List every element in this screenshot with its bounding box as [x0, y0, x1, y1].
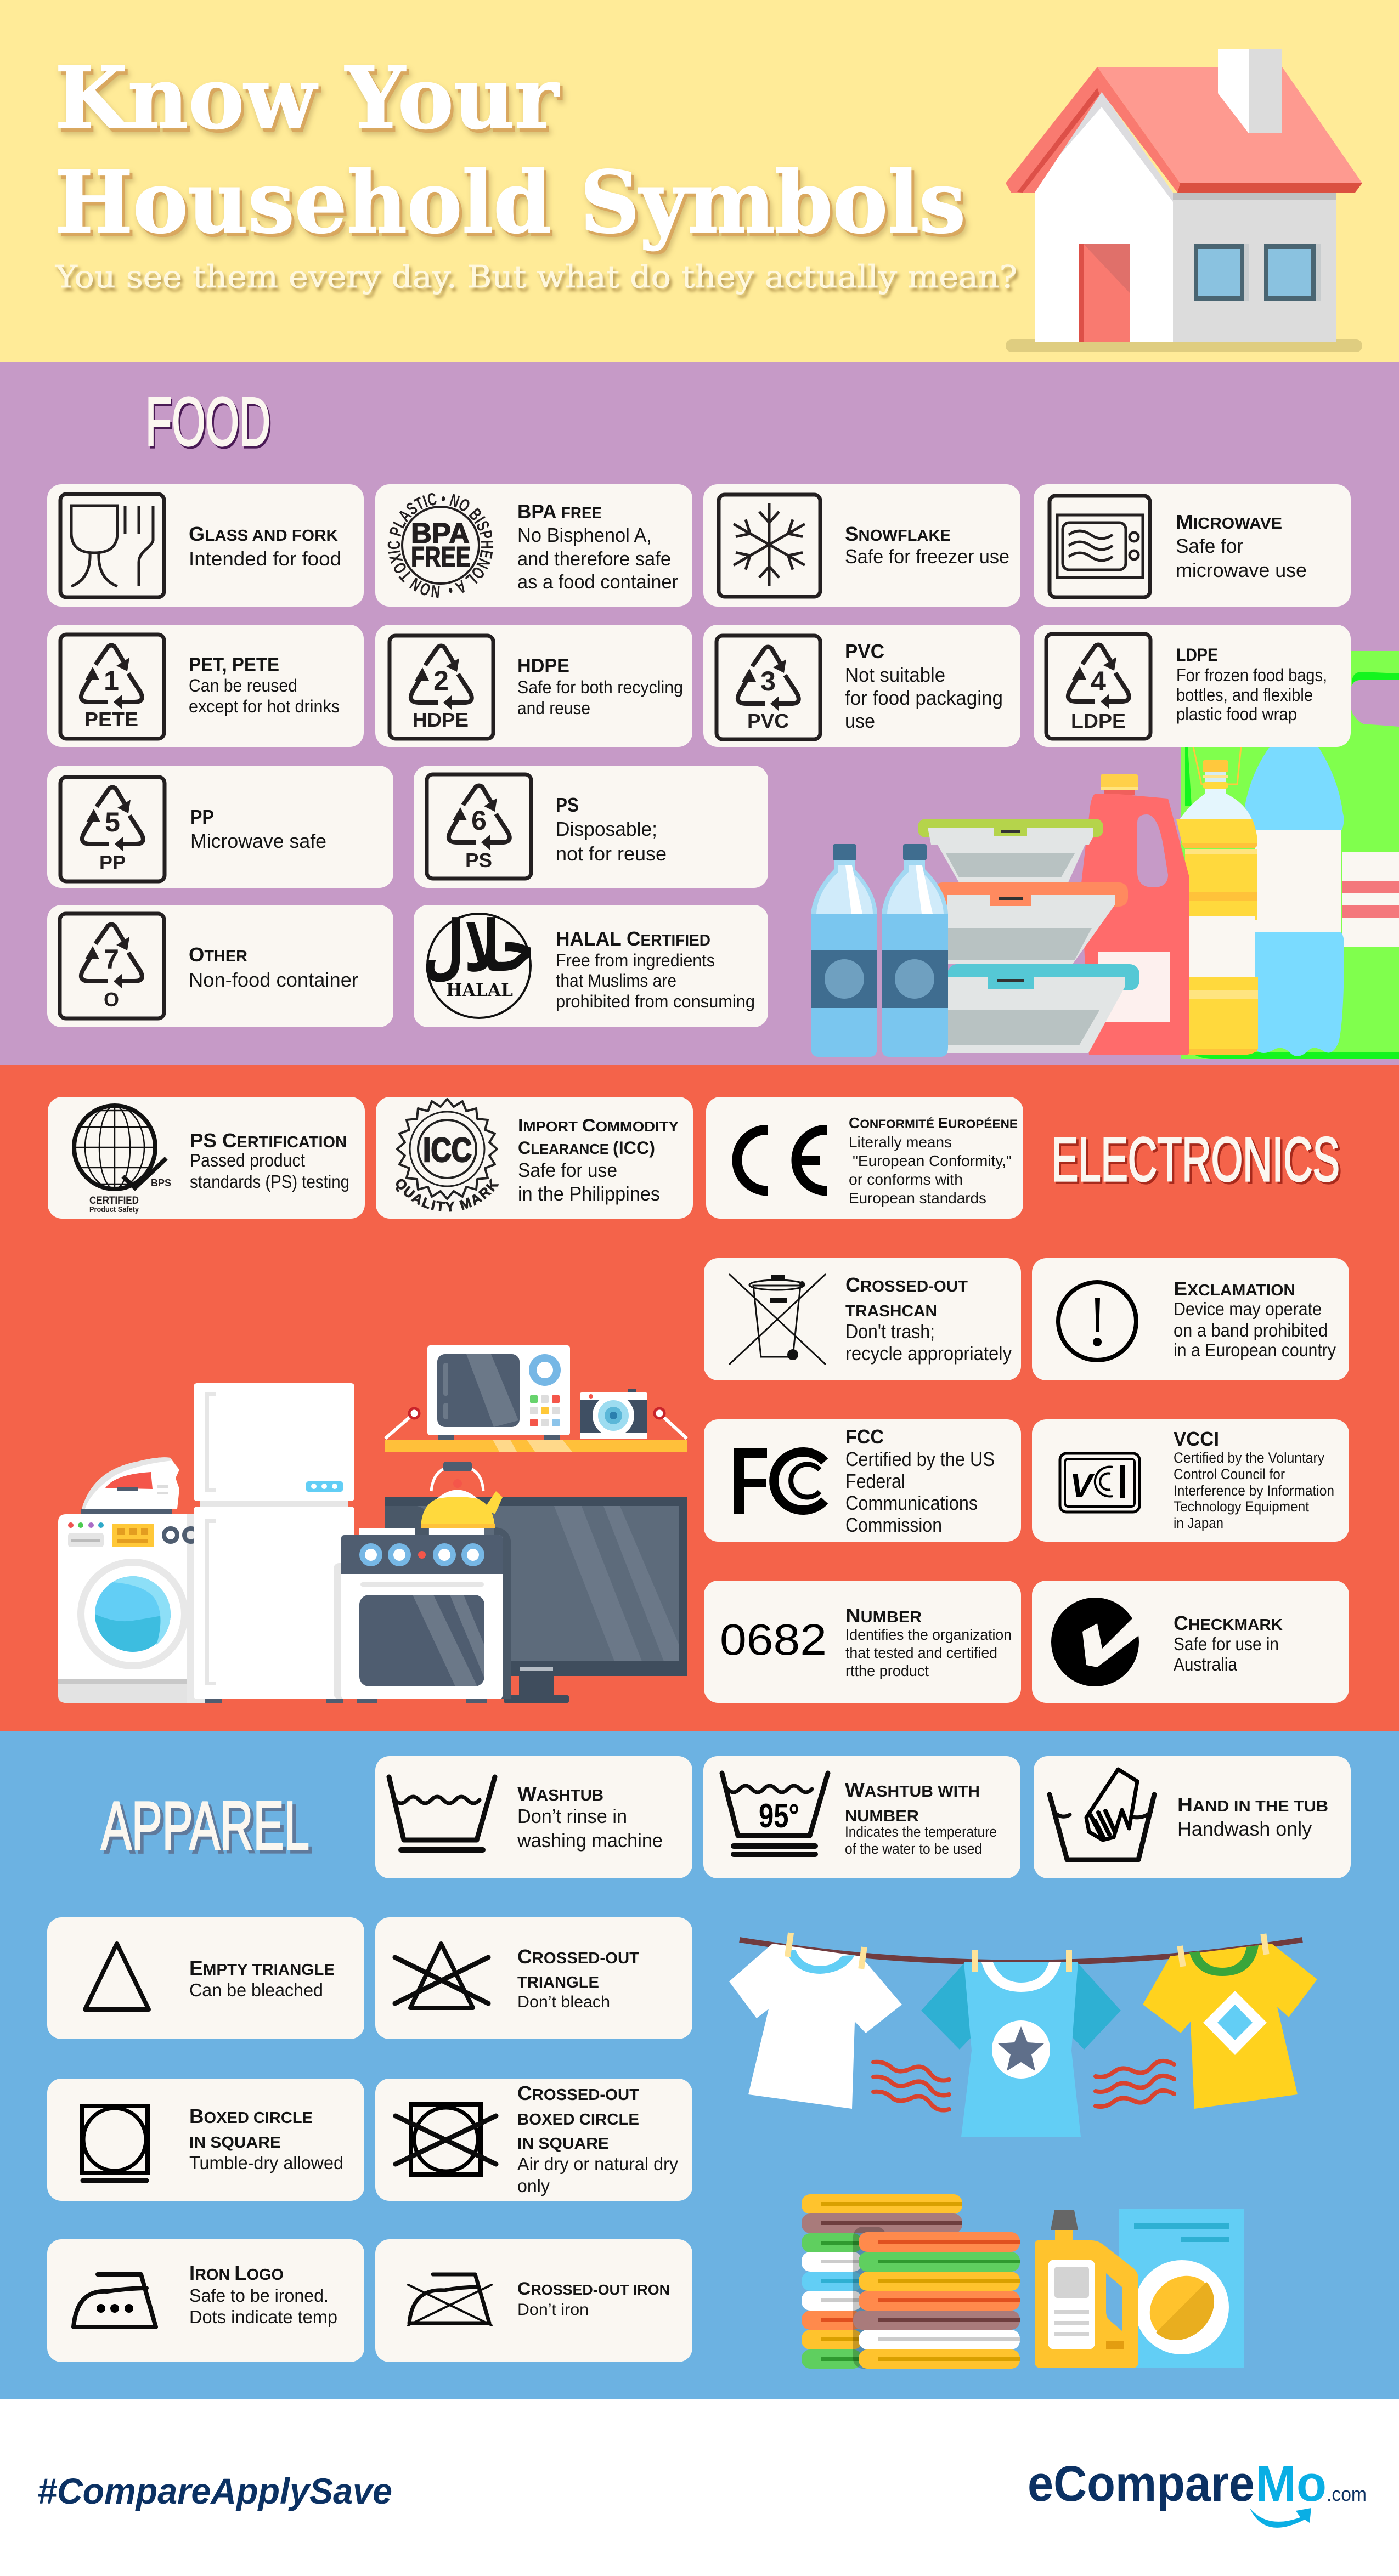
icon: recycle 6 PS — [427, 774, 531, 879]
text: conformité européene — [849, 1114, 1018, 1207]
card: checkmark — [1032, 1581, 1349, 1703]
text: crossed-out iron: Don’t iron — [517, 2301, 589, 2319]
icon: ICC quality mark: ICC — [423, 1131, 472, 1169]
card: VCCI — [1032, 1419, 1349, 1542]
text: import commodity clearance: CLEARANCE (ICC) — [518, 1138, 655, 1158]
icon: PS certification mark: CERTIFIED — [89, 1195, 139, 1207]
text: halal certified — [556, 927, 755, 1011]
text: FCC: Federal — [845, 1470, 905, 1492]
text: number: Identifies the organization — [845, 1626, 1012, 1643]
illustration: laundry stack, detergent and box — [802, 2194, 1244, 2369]
panel: electronics section — [0, 1065, 1399, 1731]
text: crossed-out boxed circle — [517, 2082, 678, 2196]
icon: triangle — [85, 1944, 149, 2009]
text: microwave: microwave use — [1176, 559, 1307, 581]
text: PET, PETE: Can be reused — [189, 676, 297, 695]
text: boxed circle: BOXED CIRCLE — [189, 2105, 313, 2127]
text: exclamation — [1174, 1277, 1336, 1360]
text: hand in the tub: HAND IN THE TUB — [1177, 1793, 1328, 1816]
text: glass and fork: GLASS AND FORK — [189, 523, 338, 545]
icon: iron with dots — [74, 2274, 156, 2327]
text: checkmark: Australia — [1174, 1654, 1238, 1674]
text: halal certified: HALAL CERTIFIED — [556, 927, 710, 950]
text: BPA free: and therefore safe — [517, 547, 671, 570]
text: other: Non-food container — [189, 969, 358, 991]
text: FCC: FCC — [845, 1425, 884, 1448]
icon: recycle 7 O — [60, 914, 164, 1018]
card: halal certified — [414, 905, 768, 1027]
text: conformité européene: "European Conformity," — [853, 1152, 1012, 1169]
icon: recycle 1 PETE: PETE — [84, 708, 138, 731]
text: VCCI: Control Council for — [1174, 1466, 1285, 1482]
text: crossed-out boxed circle: Air dry or natural dry — [517, 2154, 678, 2174]
text: crossed-out trashcan: CROSSED-OUT — [845, 1273, 968, 1296]
text: import commodity clearance — [518, 1116, 679, 1205]
card: washtub — [375, 1756, 692, 1878]
text: BPA free: No Bisphenol A, — [517, 524, 652, 546]
text: PS: not for reuse — [556, 842, 667, 865]
icon: BPA free seal: BPA — [411, 518, 470, 550]
illustration: food containers and bottles — [811, 651, 1399, 1059]
text: crossed-out trashcan: TRASHCAN — [845, 1303, 937, 1320]
text: PS certification: standards (PS) testing — [190, 1171, 349, 1192]
icon: checkmark — [1051, 1598, 1144, 1686]
text: HDPE: Safe for both recycling — [517, 677, 683, 697]
text: FCC — [845, 1425, 995, 1536]
text: crossed-out boxed circle: BOXED CIRCLE — [517, 2111, 639, 2128]
text: HDPE — [517, 654, 683, 718]
text: BPA free — [517, 500, 678, 593]
icon: PS certification mark: BPS — [151, 1177, 171, 1188]
illustration: clothesline — [729, 1933, 1317, 2137]
card: LDPE — [1034, 625, 1351, 747]
card: PS — [414, 766, 768, 888]
icon: recycle 4 LDPE: LDPE — [1071, 710, 1126, 732]
text: exclamation: on a band prohibited — [1174, 1320, 1328, 1340]
icon: washtub — [389, 1777, 495, 1850]
text: PS certification — [190, 1129, 349, 1192]
card: PS certification — [48, 1097, 365, 1219]
text: import commodity clearance: in the Philippines — [518, 1182, 660, 1205]
icon: hand in the tub — [1050, 1769, 1154, 1860]
text: washtub — [517, 1782, 663, 1852]
text: washtub: washing machine — [517, 1829, 663, 1852]
icon: recycle 2 HDPE — [390, 636, 493, 739]
icon: washtub 95: 95° — [759, 1797, 799, 1835]
text: exclamation: EXCLAMATION — [1174, 1277, 1295, 1300]
text: number — [845, 1604, 1012, 1679]
text: VCCI — [1174, 1428, 1334, 1531]
icon: recycle 3 PVC: PVC — [747, 710, 789, 732]
text: VCCI: Interference by Information — [1174, 1482, 1334, 1499]
text: washtub: WASHTUB — [517, 1782, 603, 1805]
text: FCC: Commission — [845, 1514, 942, 1536]
text: FCC: Certified by the US — [845, 1448, 995, 1470]
card: number — [704, 1581, 1021, 1703]
card: hand in the tub — [1034, 1756, 1351, 1878]
text: FCC: Communications — [845, 1492, 978, 1514]
text: microwave: MICROWAVE — [1176, 511, 1282, 533]
card: crossed-out boxed circle — [375, 2079, 692, 2201]
heading: apparel: APPAREL — [101, 1788, 309, 1864]
text: crossed-out triangle — [517, 1945, 640, 2011]
icon: microwave — [1050, 496, 1150, 597]
card: glass and fork — [47, 484, 364, 607]
text: conformité européene: European standards — [849, 1190, 986, 1207]
text: iron logo: IRON LOGO — [189, 2262, 284, 2284]
icon: halal seal: HALAL — [446, 980, 513, 1000]
text: conformité européene: Literally means — [849, 1134, 952, 1151]
icon: recycle 6 PS: PS — [465, 849, 492, 871]
text: iron logo: Dots indicate temp — [189, 2307, 337, 2327]
icon: ICC quality mark: QUALITY MARK — [396, 1178, 499, 1212]
card: import commodity clearance — [376, 1097, 693, 1219]
icon: recycle 1 PETE: 1 — [104, 665, 119, 696]
text: VCCI: VCCI — [1174, 1428, 1219, 1450]
icon: crossed-out iron — [408, 2274, 492, 2325]
text: PP — [190, 806, 326, 852]
text: washtub: Don’t rinse in — [517, 1805, 627, 1827]
text: VCCI: Technology Equipment — [1174, 1498, 1309, 1515]
text: glass and fork: Intended for food — [189, 547, 341, 570]
icon: PS certification mark: Product Safety — [89, 1205, 139, 1214]
icon: VCCI logo — [1060, 1453, 1139, 1512]
icon: crossed-out boxed circle — [396, 2104, 496, 2175]
text: PVC: for food packaging — [845, 687, 1003, 709]
text: hand in the tub: Handwash only — [1177, 1818, 1312, 1840]
text: LDPE: plastic food wrap — [1176, 704, 1297, 724]
logo: eCompareMo — [1028, 2456, 1367, 2528]
icon: recycle 3 PVC — [717, 636, 820, 739]
text: boxed circle: IN SQUARE — [189, 2134, 281, 2152]
icon: recycle 2 HDPE: HDPE — [413, 709, 469, 731]
text: exclamation: Device may operate — [1174, 1299, 1322, 1319]
text: BPA free: as a food container — [517, 570, 678, 593]
text: PS certification: Passed product — [190, 1150, 305, 1170]
text: glass and fork — [189, 523, 341, 570]
text: halal certified: that Muslims are — [556, 971, 676, 990]
hashtag: #CompareApplySave — [37, 2471, 392, 2511]
text: LDPE: LDPE — [1176, 645, 1218, 665]
card: PP — [47, 766, 393, 888]
icon: recycle 6 PS: 6 — [471, 805, 487, 836]
text: import commodity clearance: IMPORT COMMODITY — [518, 1116, 679, 1135]
text: BPA free: BPA FREE — [517, 500, 602, 523]
card: other — [47, 905, 393, 1027]
icon: recycle 1 PETE — [60, 635, 164, 739]
text: PS certification: PS CERTIFICATION — [190, 1129, 347, 1152]
text: washtub with number: NUMBER — [845, 1808, 919, 1825]
text: number: that tested and certified — [845, 1644, 997, 1661]
text: washtub with number: WASHTUB WITH — [845, 1779, 980, 1801]
text: crossed-out trashcan: Don't trash; — [845, 1320, 935, 1343]
text: crossed-out iron: CROSSED-OUT IRON — [517, 2279, 670, 2298]
icon: FCC logo — [734, 1448, 825, 1514]
card: crossed-out iron — [375, 2239, 692, 2362]
text: PET, PETE: PET, PETE — [189, 653, 279, 676]
icon: ICC quality mark — [396, 1098, 499, 1212]
icon: washtub 95 — [722, 1773, 828, 1854]
title: Know Your — [55, 48, 560, 148]
text: checkmark: Safe for use in — [1174, 1634, 1279, 1654]
panel: food section — [0, 362, 1399, 1065]
text: boxed circle: Tumble-dry allowed — [189, 2153, 343, 2173]
illustration: home appliances — [58, 1345, 687, 1703]
text: VCCI: Certified by the Voluntary — [1174, 1450, 1324, 1466]
text: checkmark — [1174, 1612, 1283, 1674]
text: halal certified: Free from ingredients — [556, 950, 715, 970]
icon: crossed-out trashcan — [729, 1274, 826, 1365]
title: Household Symbols — [55, 152, 966, 252]
text: PP: PP — [190, 806, 214, 828]
text: PS: PS — [556, 794, 579, 816]
text: iron logo: Safe to be ironed. — [189, 2285, 329, 2306]
text: VCCI: in Japan — [1174, 1515, 1223, 1531]
text: LDPE: bottles, and flexible — [1176, 685, 1313, 705]
card: microwave — [1034, 484, 1351, 607]
text: number: NUMBER — [845, 1604, 922, 1627]
icon: recycle 4 LDPE: 4 — [1091, 666, 1106, 697]
icon: snowflake — [719, 495, 820, 597]
text: crossed-out boxed circle: only — [517, 2176, 550, 2196]
icon: recycle 2 HDPE: 2 — [433, 665, 449, 696]
text: import commodity clearance: Safe for use — [518, 1159, 617, 1181]
text: LDPE — [1176, 645, 1327, 724]
text: empty triangle — [189, 1957, 335, 2000]
icon: recycle 5 PP: 5 — [105, 807, 120, 837]
text: crossed-out triangle: Don’t bleach — [517, 1993, 610, 2011]
text: crossed-out iron — [517, 2279, 670, 2319]
text: PVC — [845, 640, 1003, 732]
icon: halal seal: حلال — [422, 905, 535, 987]
card: conformité européene — [706, 1097, 1023, 1219]
card: empty triangle — [47, 1917, 364, 2039]
text: HDPE: and reuse — [517, 698, 590, 718]
panel: apparel section — [0, 1731, 1399, 2399]
text: crossed-out boxed circle: CROSSED-OUT — [517, 2082, 640, 2104]
icon: glass and fork — [60, 494, 164, 597]
icon: PS certification mark — [74, 1106, 171, 1214]
card: crossed-out triangle — [375, 1917, 692, 2039]
text: washtub with number — [845, 1779, 997, 1857]
card: PET, PETE — [47, 625, 364, 747]
text: PET, PETE — [189, 653, 340, 716]
text: crossed-out boxed circle: IN SQUARE — [517, 2135, 609, 2153]
card: iron logo — [47, 2239, 364, 2362]
text: washtub with number: Indicates the temperature — [845, 1824, 997, 1840]
card: snowflake — [703, 484, 1020, 607]
text: PET, PETE: except for hot drinks — [189, 697, 340, 716]
panel: header — [0, 0, 1399, 362]
text: PVC: Not suitable — [845, 664, 945, 686]
card: boxed circle — [47, 2079, 364, 2201]
card: crossed-out trashcan — [704, 1258, 1021, 1380]
card: exclamation — [1032, 1258, 1349, 1380]
card: PVC — [703, 625, 1020, 747]
text: LDPE: For frozen food bags, — [1176, 665, 1327, 685]
text: halal certified: prohibited from consuming — [556, 992, 755, 1011]
text: snowflake — [845, 523, 1009, 568]
text: iron logo — [189, 2262, 337, 2327]
text: PVC: use — [845, 710, 875, 732]
text: other: OTHER — [189, 943, 247, 966]
card: HDPE — [375, 625, 692, 747]
text: microwave: Safe for — [1176, 535, 1243, 557]
title — [55, 48, 966, 252]
icon: recycle 5 PP: PP — [99, 851, 126, 874]
text: crossed-out triangle: TRIANGLE — [517, 1974, 599, 1991]
text: crossed-out triangle: CROSSED-OUT — [517, 1945, 640, 1968]
text: microwave — [1176, 511, 1307, 581]
text: crossed-out trashcan — [845, 1273, 1012, 1365]
icon: recycle 4 LDPE — [1046, 634, 1150, 739]
icon: exclamation — [1058, 1282, 1136, 1360]
text: HDPE: HDPE — [517, 654, 569, 677]
text: snowflake: Safe for freezer use — [845, 545, 1009, 568]
subtitle: You see them every day. But what do they actually mean? — [55, 259, 1017, 295]
heading: food: FOOD — [145, 384, 270, 460]
logo: eCompareMo: eCompare — [1028, 2456, 1255, 2512]
illustration: house — [1006, 49, 1362, 352]
icon: BPA free seal: FREE — [411, 541, 471, 573]
card: washtub with number — [703, 1756, 1020, 1878]
text: washtub with number: of the water to be used — [845, 1841, 982, 1857]
text: hand in the tub — [1177, 1793, 1328, 1840]
icon: recycle 7 O: O — [104, 988, 119, 1011]
panel: footer — [0, 2399, 1399, 2576]
icon: 0682 number: 0682 — [720, 1615, 827, 1664]
icon: recycle 7 O: 7 — [104, 944, 119, 975]
text: checkmark: CHECKMARK — [1174, 1612, 1283, 1634]
text: exclamation: in a European country — [1174, 1340, 1336, 1360]
text: PS: Disposable; — [556, 818, 657, 840]
icon: crossed-out triangle — [395, 1944, 488, 2008]
text: crossed-out trashcan: recycle appropriately — [845, 1342, 1012, 1365]
text: conformité européene: CONFORMITÉ EUROPÉENE — [849, 1114, 1018, 1131]
icon: recycle 5 PP — [60, 777, 165, 881]
icon: BPA free seal: NON TOXIC PLASTIC • NO BISPHENOL A • — [387, 493, 494, 598]
text: empty triangle: EMPTY TRIANGLE — [189, 1957, 335, 1979]
text: empty triangle: Can be bleached — [189, 1980, 323, 2000]
logo: eCompareMo: .com — [1327, 2483, 1367, 2505]
text: boxed circle — [189, 2105, 343, 2173]
text: PVC: PVC — [845, 640, 884, 663]
text: PP: Microwave safe — [190, 830, 326, 852]
text: other — [189, 943, 358, 991]
card: FCC — [704, 1419, 1021, 1542]
text: number: rtthe product — [845, 1662, 929, 1679]
icon: VCCI logo: V — [1070, 1467, 1095, 1505]
icon: CE mark — [737, 1130, 827, 1191]
text: conformité européene: or conforms with — [849, 1171, 963, 1188]
text: snowflake: SNOWFLAKE — [845, 523, 951, 545]
logo: eCompareMo: Mo — [1255, 2456, 1327, 2512]
icon: boxed circle in square — [82, 2106, 148, 2181]
card: BPA free — [375, 484, 692, 607]
icon: recycle 3 PVC: 3 — [760, 666, 776, 697]
text: PS — [556, 794, 667, 865]
